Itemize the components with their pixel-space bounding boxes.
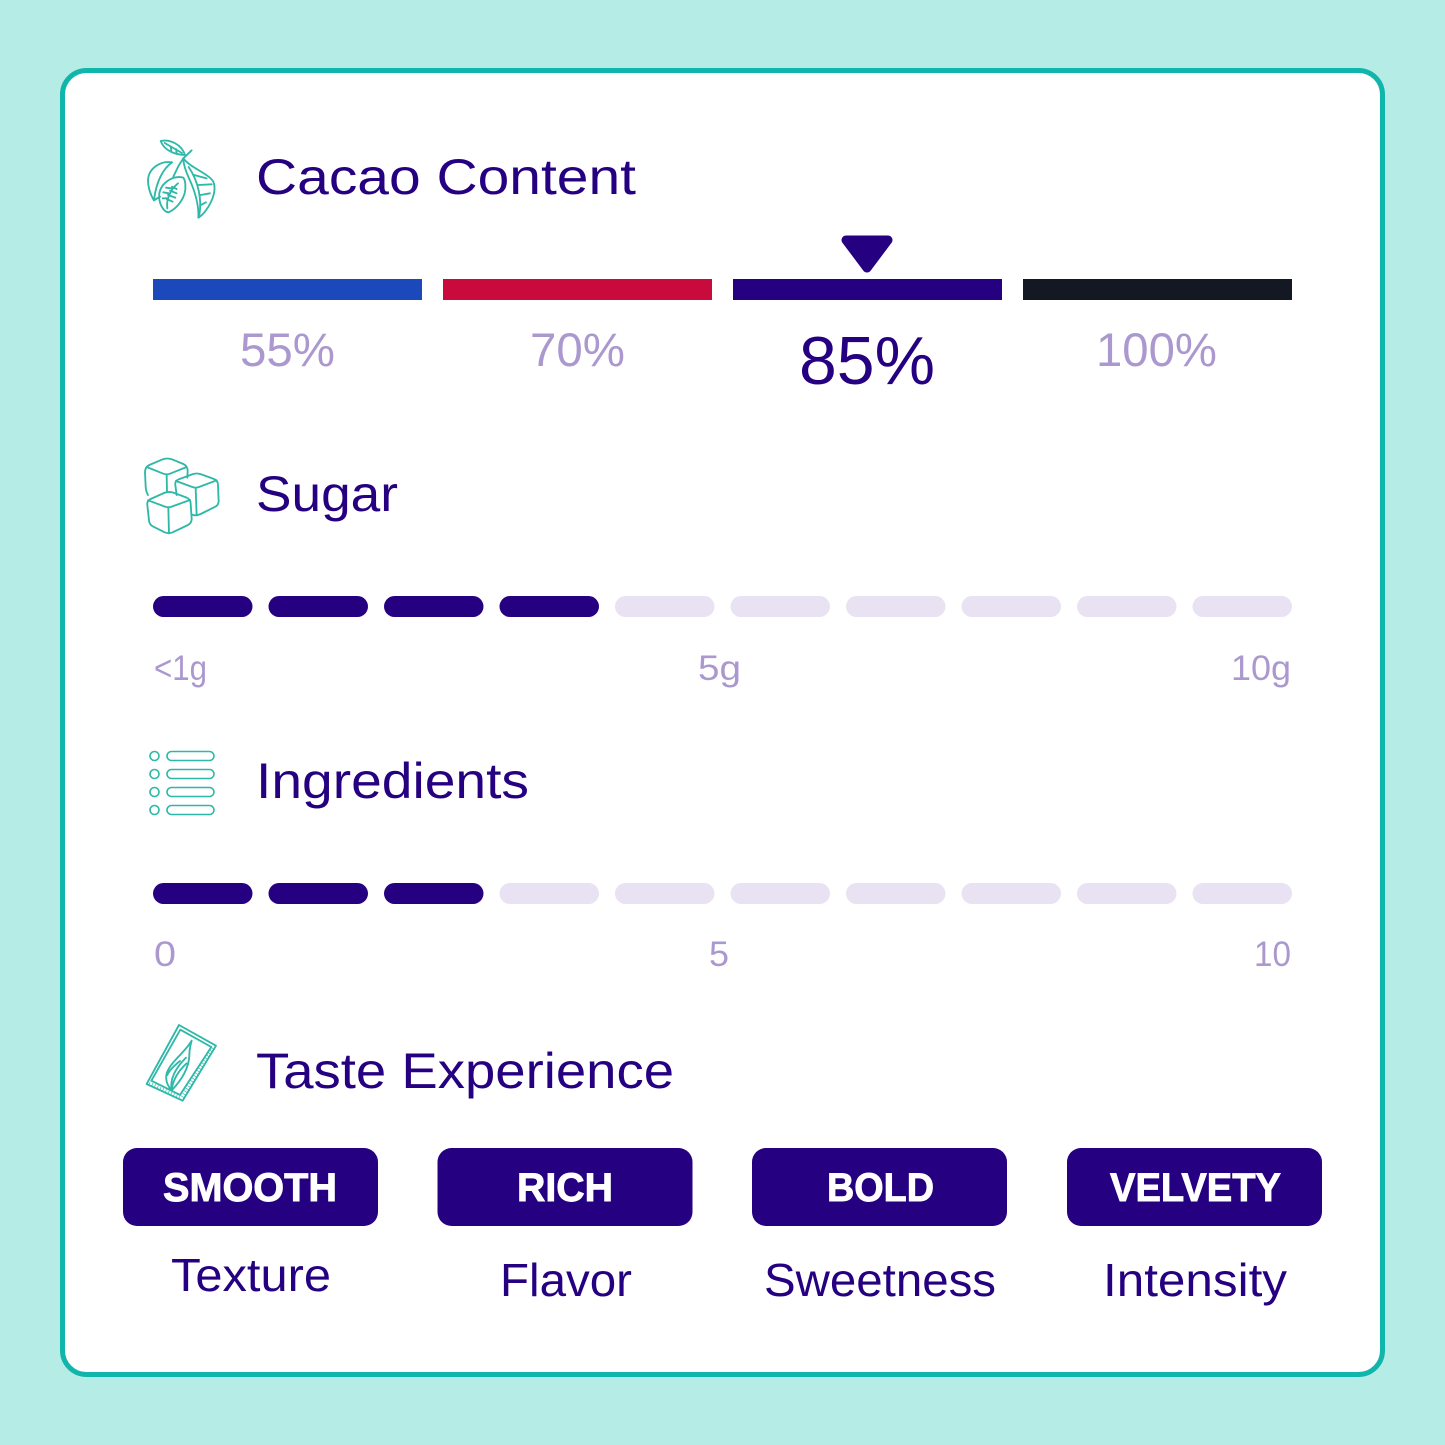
heading: taste experience: Taste Experience — [256, 1043, 674, 1099]
label: 5g: 5g — [698, 649, 741, 688]
bar: 100% — [1023, 279, 1292, 300]
marker: current level — [846, 240, 888, 268]
icon: cacao branch — [148, 141, 214, 218]
tag: smooth — [123, 1148, 378, 1226]
label: 55%: 55% — [240, 323, 335, 376]
bar: 55% — [153, 279, 422, 300]
icon: sugar cubes — [145, 458, 219, 533]
bar: 70% — [443, 279, 712, 300]
scale: sugar 4 of 10 — [153, 596, 1292, 617]
label: flavor: Flavor — [500, 1254, 632, 1306]
label: 70%: 70% — [530, 323, 625, 376]
label: 100%: 100% — [1096, 323, 1217, 376]
label: 10: 10 — [1254, 935, 1291, 974]
bar: 85% — [733, 279, 1002, 300]
tag: bold — [752, 1148, 1007, 1226]
label: 0: 0 — [154, 935, 176, 974]
label: 10g: 10g — [1231, 649, 1291, 688]
tag: smooth: SMOOTH — [163, 1166, 337, 1210]
tag: bold: BOLD — [827, 1166, 934, 1210]
tag: rich — [438, 1148, 692, 1226]
heading: cacao content: Cacao Content — [256, 149, 636, 205]
tag: rich: RICH — [517, 1166, 613, 1210]
tag: velvety: VELVETY — [1110, 1166, 1281, 1210]
panel: sugar — [145, 458, 1292, 688]
panel: taste experience — [123, 1025, 1322, 1306]
panel: cacao content — [148, 141, 1292, 399]
label: intensity: Intensity — [1103, 1254, 1287, 1306]
panel: ingredients — [150, 752, 1292, 974]
label: less than 1g: <1g — [154, 649, 207, 688]
label: 5: 5 — [709, 935, 729, 974]
heading: ingredients: Ingredients — [256, 753, 529, 809]
heading: sugar: Sugar — [256, 466, 398, 522]
icon: ingredient list — [150, 752, 214, 814]
label: 85%: 85% — [799, 323, 935, 399]
tag: velvety — [1067, 1148, 1322, 1226]
scale: ingredients 3 of 10 — [153, 883, 1292, 904]
label: sweetness: Sweetness — [764, 1254, 996, 1306]
icon: chocolate packet — [147, 1025, 216, 1101]
label: texture: Texture — [171, 1249, 331, 1301]
